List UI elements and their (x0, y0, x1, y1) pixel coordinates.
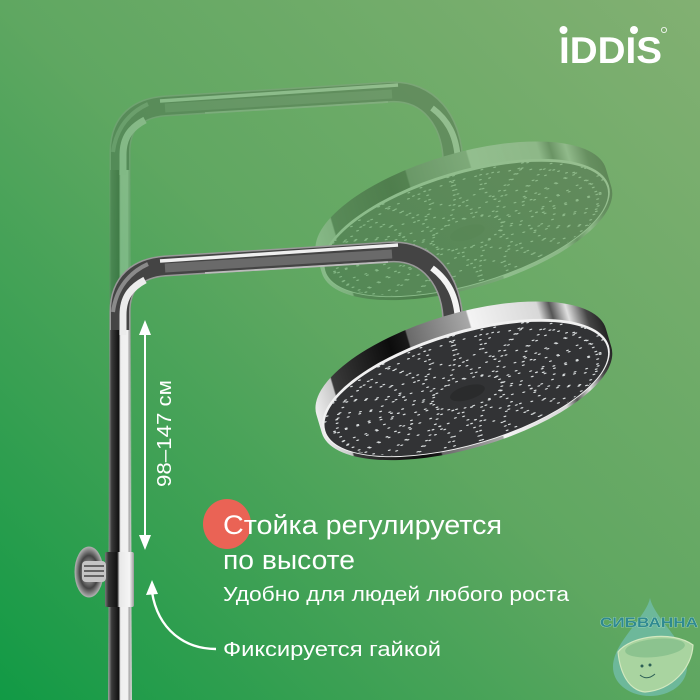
ghost shower: raised position (108, 85, 643, 552)
red accent circle (203, 499, 251, 549)
height clamp (75, 547, 134, 607)
height arrow (139, 320, 151, 550)
heading: по высоте (223, 545, 355, 575)
subheading: Удобно для людей любого роста (223, 584, 570, 606)
heading (223, 510, 502, 575)
height label: 98–147 см (154, 380, 176, 487)
logo: iddis: IDDIS (559, 30, 662, 71)
nut caption: Фиксируется гайкой (223, 639, 441, 661)
watermark: sibvanna (600, 598, 698, 696)
watermark: sibvanna: СИБВАННА (600, 614, 698, 630)
chrome shower: lowered position (108, 245, 643, 700)
heading: Стойка регулируется (223, 510, 502, 540)
curved arrow (146, 580, 216, 649)
